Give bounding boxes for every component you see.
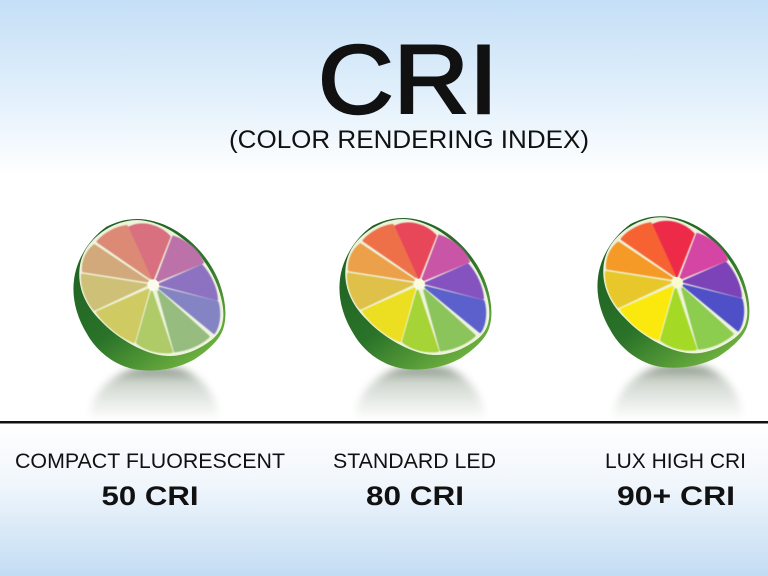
- title: CRI: [318, 25, 498, 134]
- label: lux high CRI: 90+ CRI: [617, 481, 735, 511]
- label: standard LED: 80 CRI: [366, 481, 464, 511]
- pith: [345, 219, 489, 355]
- label: compact fluorescent: [15, 450, 285, 511]
- subtitle: (COLOR RENDERING INDEX): [229, 126, 589, 154]
- hub: [148, 279, 159, 291]
- label: compact fluorescent: 50 CRI: [102, 481, 198, 511]
- lime: standard LED 80 CRI: [339, 218, 491, 420]
- lime: lux high CRI 90+ CRI: [597, 216, 749, 420]
- label: standard LED: [333, 450, 496, 511]
- reflection shadow: [612, 364, 744, 420]
- rind: [73, 219, 225, 370]
- rind: [597, 216, 749, 368]
- reflection shadow: [354, 366, 486, 420]
- pith: [79, 220, 223, 356]
- label: lux high CRI: [605, 450, 746, 511]
- label: lux high CRI: LUX HIGH CRI: [605, 450, 746, 473]
- rind: [339, 218, 491, 369]
- hub: [672, 277, 683, 288]
- segments: [348, 224, 485, 351]
- lime: compact fluorescent 50 CRI: [73, 219, 225, 420]
- horizontal divider: [0, 421, 768, 424]
- segments: [606, 222, 743, 349]
- hub: [414, 279, 425, 289]
- segments: [82, 225, 219, 352]
- reflection shadow: [88, 366, 220, 420]
- label: compact fluorescent: COMPACT FLUORESCENT: [15, 450, 285, 473]
- pith: [603, 217, 747, 353]
- label: standard LED: STANDARD LED: [333, 450, 496, 473]
